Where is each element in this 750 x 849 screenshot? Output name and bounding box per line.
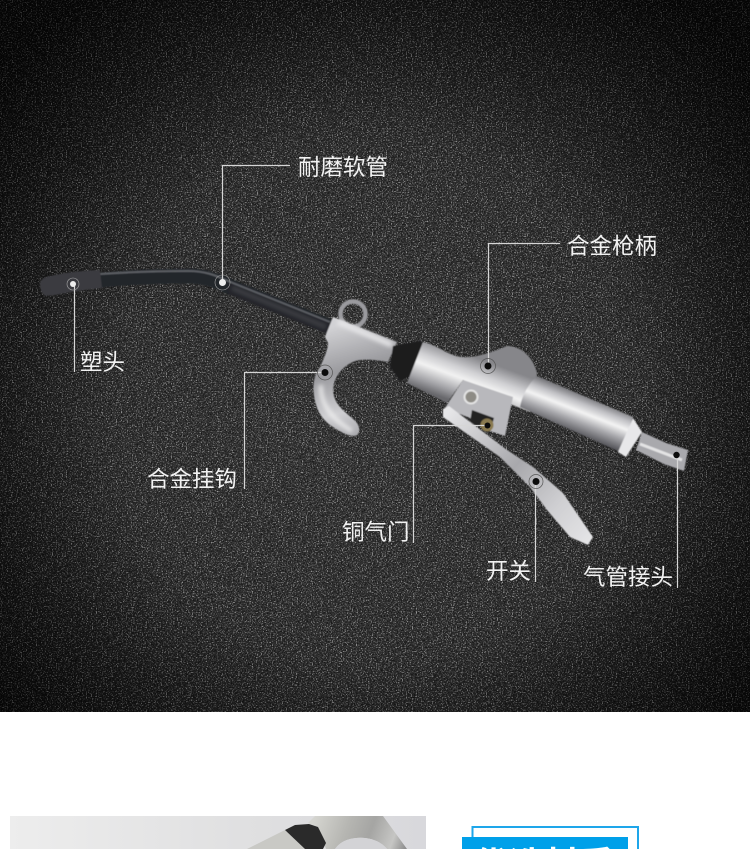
photo: hook inner shade (336, 838, 378, 849)
heading: 优选材质 (462, 827, 638, 849)
brass valve (470, 410, 494, 432)
grip body (407, 342, 537, 412)
hook highlight (321, 385, 352, 431)
neck highlight (338, 322, 392, 345)
label: 铜气门: 铜气门 (342, 520, 410, 545)
black collar (390, 341, 424, 381)
callout lines (74, 166, 678, 588)
photo: black collar (285, 824, 326, 849)
markers on gun (67, 275, 680, 488)
hex nut (618, 418, 642, 457)
marker: handle (480, 358, 496, 374)
air fitting (636, 432, 688, 471)
plastic tip (40, 270, 102, 296)
lever switch (443, 406, 593, 545)
photo: silver hook (308, 816, 407, 849)
screw (464, 390, 478, 404)
label: 塑头: 塑头 (80, 350, 125, 375)
heading blue plate (462, 837, 628, 849)
marker: hose (215, 275, 230, 290)
ring (340, 302, 366, 326)
hose (100, 271, 330, 327)
label: 耐磨软管: 耐磨软管 (298, 155, 388, 180)
hook and neck (313, 317, 397, 436)
barrel (520, 376, 633, 452)
heading outline frame (472, 827, 638, 849)
panel: product close-up photo (10, 816, 426, 849)
illustration: air blow gun (40, 270, 688, 545)
trigger block (445, 380, 513, 436)
marker: valve (484, 422, 490, 428)
marker: tip (67, 278, 79, 290)
label: 气管接头: 气管接头 (583, 565, 673, 590)
photo: grip body (247, 830, 306, 849)
fitting shine (640, 444, 682, 460)
marker: fitting (673, 452, 680, 458)
label: 开关: 开关 (486, 559, 531, 584)
marker: hook (318, 365, 332, 380)
label: 合金挂钩: 合金挂钩 (147, 467, 237, 492)
label: 合金枪柄: 合金枪柄 (567, 234, 657, 259)
marker: switch (529, 474, 543, 488)
